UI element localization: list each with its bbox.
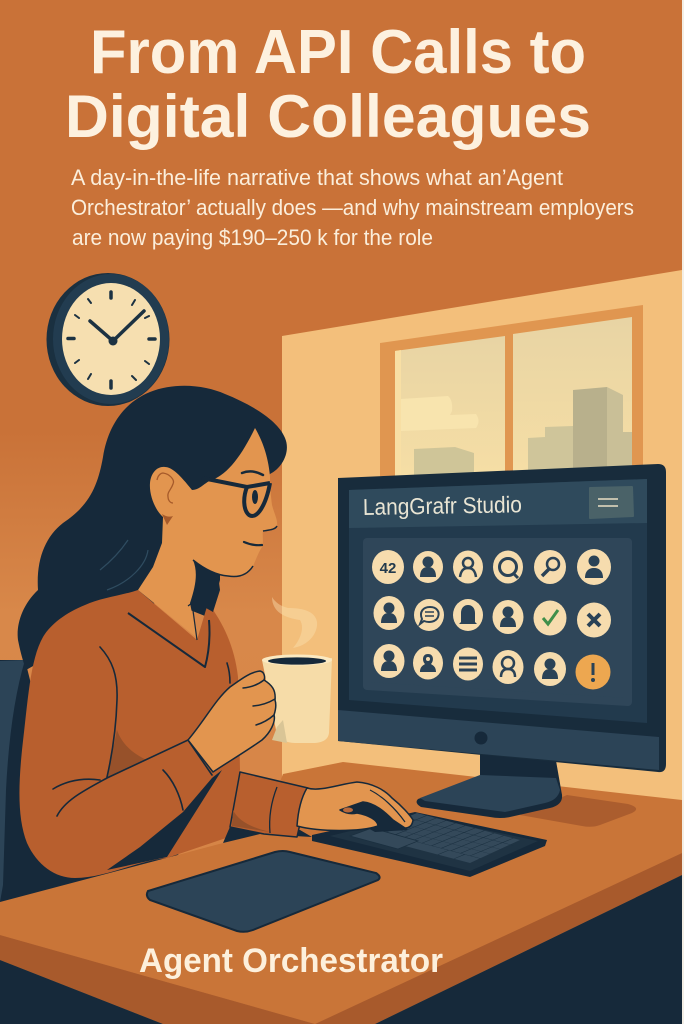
coffee mug (262, 654, 332, 743)
role caption: Agent Orchestrator (139, 942, 443, 980)
finger line (370, 790, 405, 822)
icon: 42 (372, 550, 404, 584)
far hand (297, 782, 413, 830)
monitor shadow (520, 795, 636, 827)
icon: outline person (492, 650, 524, 684)
monitor stand (417, 750, 562, 818)
far sleeve (230, 772, 308, 837)
under-arm shadow (223, 822, 312, 843)
app title: LangGrafr Studio (363, 491, 522, 520)
eyebrow (242, 471, 263, 475)
woman: sweater torso and arm (19, 590, 240, 878)
power button (474, 732, 488, 744)
icon: person (413, 551, 443, 583)
subtitle: Orchestrator’ actually does —and why mainstream employers (71, 195, 634, 220)
clouds (401, 396, 478, 431)
icon: person (374, 596, 404, 630)
steam (272, 597, 317, 648)
near hand holding mug (188, 671, 276, 772)
keyboard (312, 812, 547, 877)
gap between arm and torso (107, 770, 222, 870)
sweater shading (107, 730, 147, 778)
icon: person (534, 652, 566, 686)
desk (0, 762, 682, 1024)
screen (349, 479, 647, 723)
hair strands (100, 540, 148, 590)
thumbnail (343, 808, 353, 812)
hair back (18, 386, 287, 670)
icon: silhouette (453, 599, 483, 631)
window (380, 305, 643, 490)
wall panel (282, 270, 682, 810)
icon: badge person (413, 646, 443, 680)
title (65, 18, 591, 150)
icon: person (577, 549, 611, 585)
icon: list (453, 648, 483, 680)
right image edge (682, 0, 684, 1024)
icon: outline person (453, 550, 483, 584)
title: Digital Colleagues (65, 83, 591, 150)
glasses (202, 478, 270, 516)
nose line (263, 526, 277, 531)
app header bar (349, 479, 647, 528)
space bar (350, 828, 418, 849)
subtitle: are now paying $190–250 k for the role (72, 225, 433, 250)
hair behind neck, right (192, 560, 220, 612)
subtitle (71, 165, 634, 250)
office chair (0, 660, 190, 925)
icon grid (372, 549, 611, 690)
icon: green check (534, 600, 566, 636)
mouth (244, 542, 262, 545)
ear detail (157, 473, 173, 525)
sweater fold lines (53, 647, 230, 816)
icon: 42: 42 (380, 560, 396, 577)
monitor chin (338, 710, 659, 770)
icon: person (374, 644, 404, 678)
neck fold (188, 603, 197, 640)
icon: magnifier (534, 550, 566, 584)
city buildings (414, 387, 632, 490)
wall clock (46, 273, 170, 406)
v-neck collar (128, 613, 210, 667)
icon: alert (576, 654, 610, 690)
jaw line (193, 560, 253, 577)
icon: chat bubble (414, 599, 444, 631)
icon: person (492, 600, 524, 634)
tablet (147, 851, 380, 932)
title: From API Calls to (90, 18, 586, 87)
monitor (338, 464, 666, 772)
woman: face and neck (100, 428, 277, 640)
subtitle: A day-in-the-life narrative that shows what an’Agent (71, 165, 563, 190)
far arm and hand on mouse (223, 772, 413, 843)
icon: search ring (493, 550, 523, 584)
icon: cross (577, 602, 611, 638)
icon panel (367, 542, 628, 702)
mouse (335, 800, 408, 832)
menu button (590, 487, 633, 518)
